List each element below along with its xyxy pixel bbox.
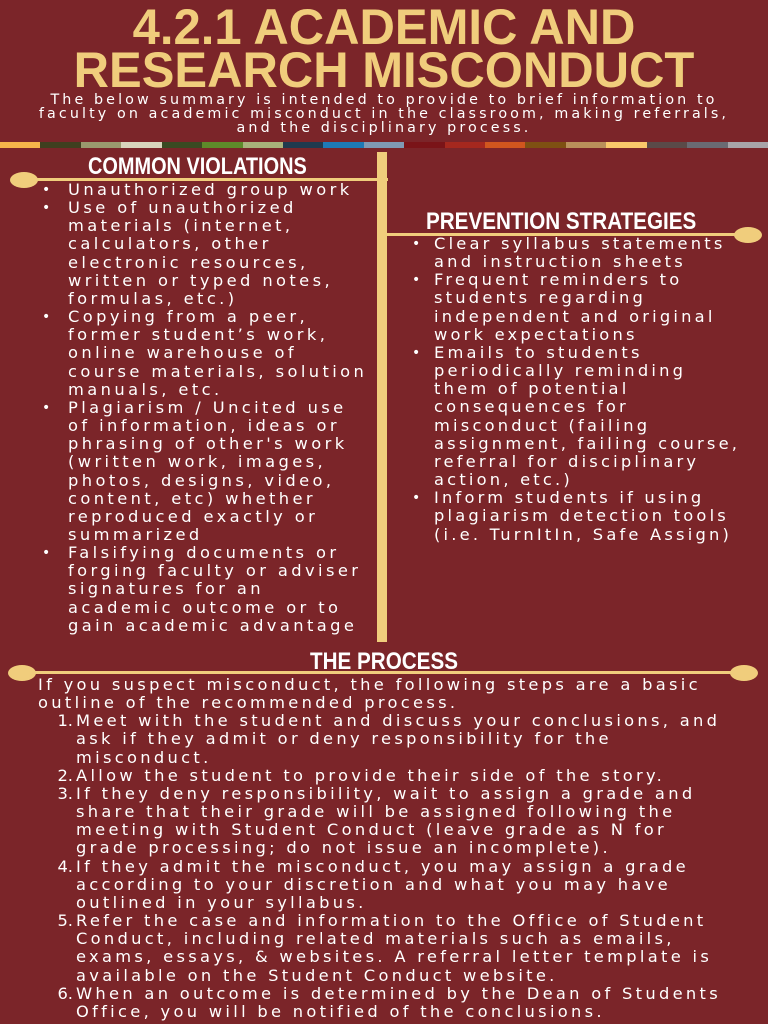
list: prevention strategies: Clear syllabus statements (434, 234, 726, 253)
vertical divider (377, 152, 387, 642)
process text (38, 675, 721, 1021)
subtitle (39, 92, 729, 136)
heading line process (8, 665, 758, 681)
process text: ask if they admit or deny responsibility for the (76, 729, 612, 748)
process text: If they deny responsibility, wait to assign a grade and (76, 784, 695, 803)
process text: Office, you will be notified of the conclusions. (76, 1002, 605, 1021)
list: common violations: gain academic advantage (68, 616, 357, 635)
text: • (42, 309, 54, 325)
color stripe (0, 142, 768, 148)
text: • (42, 545, 54, 561)
text: • (412, 345, 423, 361)
text: • (412, 490, 423, 506)
heading: the process: THE PROCESS (310, 648, 458, 675)
process text: Conduct, including related materials such as emails, (76, 929, 675, 948)
list: common violations: reproduced exactly or (68, 507, 318, 526)
title (74, 0, 694, 98)
list: common violations: academic outcome or to (68, 598, 341, 617)
process text: outlined in your syllabus. (76, 893, 367, 912)
list: prevention strategies: them of potential (434, 379, 629, 398)
process text: If they admit the misconduct, you may assign a grade (76, 857, 689, 876)
process text: Allow the student to provide their side of the story. (76, 766, 665, 785)
list: common violations: course materials, solution (68, 362, 367, 381)
list: common violations: written or typed notes, (68, 271, 333, 290)
process text: When an outcome is determined by the Dean of Students (76, 984, 721, 1003)
list: prevention strategies: independent and original (434, 307, 716, 326)
process text: meeting with Student Conduct (leave grade as N for (76, 820, 667, 839)
process text: 5. (57, 911, 73, 930)
list: prevention strategies: referral for disciplinary (434, 452, 699, 471)
heading line right (387, 227, 762, 243)
list: common violations: formulas, etc.) (68, 289, 238, 308)
list: prevention strategies: action, etc.) (434, 470, 573, 489)
process text: 3. (57, 784, 73, 803)
process text: 1. (57, 711, 73, 730)
list: common violations: calculators, other (68, 234, 272, 253)
list: common violations: photos, designs, video, (68, 470, 334, 490)
process text: according to your discretion and what you may have (76, 875, 671, 894)
list: prevention strategies: Inform students if using (434, 488, 704, 507)
list: prevention strategies: assignment, failing course, (434, 434, 740, 453)
list: prevention strategies: consequences for (434, 397, 629, 416)
list: common violations: Plagiarism / Uncited use (68, 398, 347, 417)
list: prevention strategies: periodically reminding (434, 361, 686, 380)
list: common violations: manuals, etc. (68, 380, 223, 399)
list: common violations: (written work, images, (68, 452, 326, 471)
list: prevention strategies: plagiarism detection tools (434, 506, 729, 525)
list: common violations: Falsifying documents or (68, 543, 339, 562)
list: prevention strategies: students regarding (434, 288, 646, 307)
process text: 6. (57, 984, 73, 1003)
list: prevention strategies: Frequent reminders to (434, 270, 682, 289)
heading line left (10, 172, 388, 188)
heading: common violations: COMMON VIOLATIONS (88, 153, 307, 180)
process text: outline of the recommended process. (38, 693, 458, 712)
list: common violations: electronic resources, (68, 253, 309, 272)
text: • (42, 400, 54, 416)
list: common violations: materials (internet, (68, 216, 294, 235)
text: • (412, 272, 423, 288)
list: common violations: former student’s work, (68, 325, 328, 344)
list: common violations: online warehouse of (68, 343, 297, 362)
list: common violations: of information, ideas or (68, 416, 340, 435)
list: prevention strategies: misconduct (failing (434, 416, 650, 435)
title: RESEARCH MISCONDUCT (74, 42, 694, 98)
list: common violations: content, etc) whether (68, 489, 316, 508)
subtitle: The below summary is intended to provide to brief information to (50, 92, 718, 108)
list: common violations: forging faculty or adviser (68, 561, 361, 580)
process text: Refer the case and information to the Office of Student (76, 911, 706, 930)
list: common violations: Copying from a peer, (68, 307, 308, 326)
process text: exams, essays, & websites. A referral letter template is (76, 947, 712, 966)
process text: grade processing; do not issue an incomplete). (76, 838, 611, 857)
process text: available on the Student Conduct website. (76, 966, 558, 984)
process text: share that their grade will be assigned following the (76, 802, 675, 821)
heading: prevention strategies: PREVENTION STRATEGIES (426, 208, 696, 235)
list: prevention strategies: Emails to students (434, 343, 643, 362)
process text: misconduct. (76, 748, 212, 767)
list: common violations: signatures for an (68, 579, 264, 598)
text: • (42, 182, 54, 198)
process text: 4. (57, 857, 73, 876)
process text: Meet with the student and discuss your conclusions, and (76, 711, 720, 730)
list: common violations: summarized (68, 525, 203, 544)
title: 4.2.1 ACADEMIC AND (133, 0, 635, 55)
list: common violations: Unauthorized group work (68, 180, 353, 199)
list: common violations: Use of unauthorized (68, 198, 297, 217)
process text: If you suspect misconduct, the following steps are a basic (38, 675, 701, 694)
list: prevention strategies (412, 234, 740, 544)
process text: 2. (57, 766, 73, 785)
list: common violations (42, 180, 367, 635)
list: prevention strategies: work expectations (434, 325, 638, 344)
subtitle: and the disciplinary process. (237, 120, 531, 136)
list: prevention strategies: and instruction sheets (434, 252, 686, 271)
text: • (412, 236, 423, 252)
list: prevention strategies: (i.e. TurnItIn, Safe Assign) (434, 524, 732, 544)
subtitle: faculty on academic misconduct in the classroom, making referrals, (39, 106, 729, 122)
list: common violations: phrasing of other's work (68, 434, 348, 453)
text: • (42, 200, 54, 216)
